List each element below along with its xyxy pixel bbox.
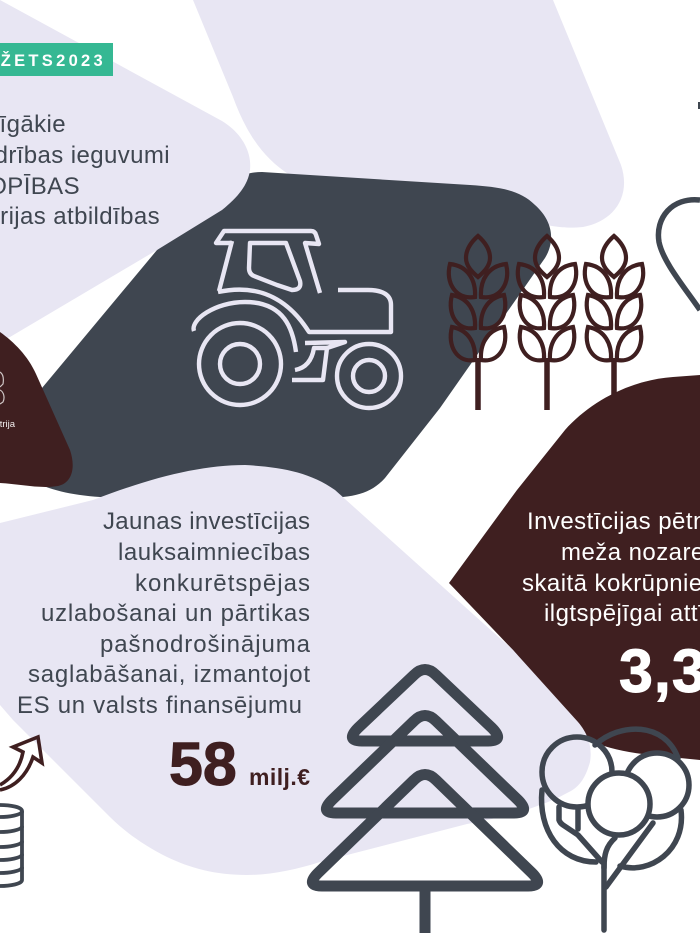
text block: new investments <box>17 508 311 719</box>
icon: coin stack <box>0 805 22 886</box>
figure: 58 million euro: 58 <box>169 730 237 798</box>
text block: new investments: Jaunas investīcijas <box>103 508 310 535</box>
icon: wheat stalks <box>449 236 643 410</box>
text block: new investments: saglabāšanai, izmantojot <box>28 661 310 688</box>
panel: dark tractor shape <box>0 172 551 498</box>
text block: new investments: uzlabošanai un pārtikas <box>41 600 310 627</box>
icon: heart outline <box>658 200 700 310</box>
icon: wheat 2 <box>518 236 576 410</box>
panel: top left lavender shape <box>0 0 250 340</box>
badge <box>0 43 113 76</box>
text block: new investments: pašnodrošinājuma <box>100 631 311 658</box>
mark: top right fragment <box>698 102 700 109</box>
icon: wheat 1 <box>449 236 507 410</box>
icon: balloon tree <box>542 729 689 930</box>
panel: small brown logo shape <box>0 332 73 487</box>
icon: wheat 3 <box>585 236 643 410</box>
text block: new investments: lauksaimniecības <box>118 539 310 566</box>
text block: new investments: ES un valsts finansējumu <box>17 692 302 719</box>
panel: top centre lavender shape <box>193 0 624 228</box>
text block: research investments <box>522 508 700 627</box>
icon: tractor <box>194 231 401 408</box>
figure: 58 million euro <box>169 730 310 798</box>
icon: growth arrow <box>0 737 42 790</box>
figure: 58 million euro: milj.€ <box>249 764 310 790</box>
panel: right brown shape <box>449 375 700 760</box>
text block: new investments: konkurētspējas <box>135 570 310 597</box>
text block: top left heading <box>0 111 170 230</box>
panel: lower lavender shape <box>0 465 591 875</box>
icon: emblem <box>0 372 4 404</box>
icon: fir tree <box>312 670 538 933</box>
